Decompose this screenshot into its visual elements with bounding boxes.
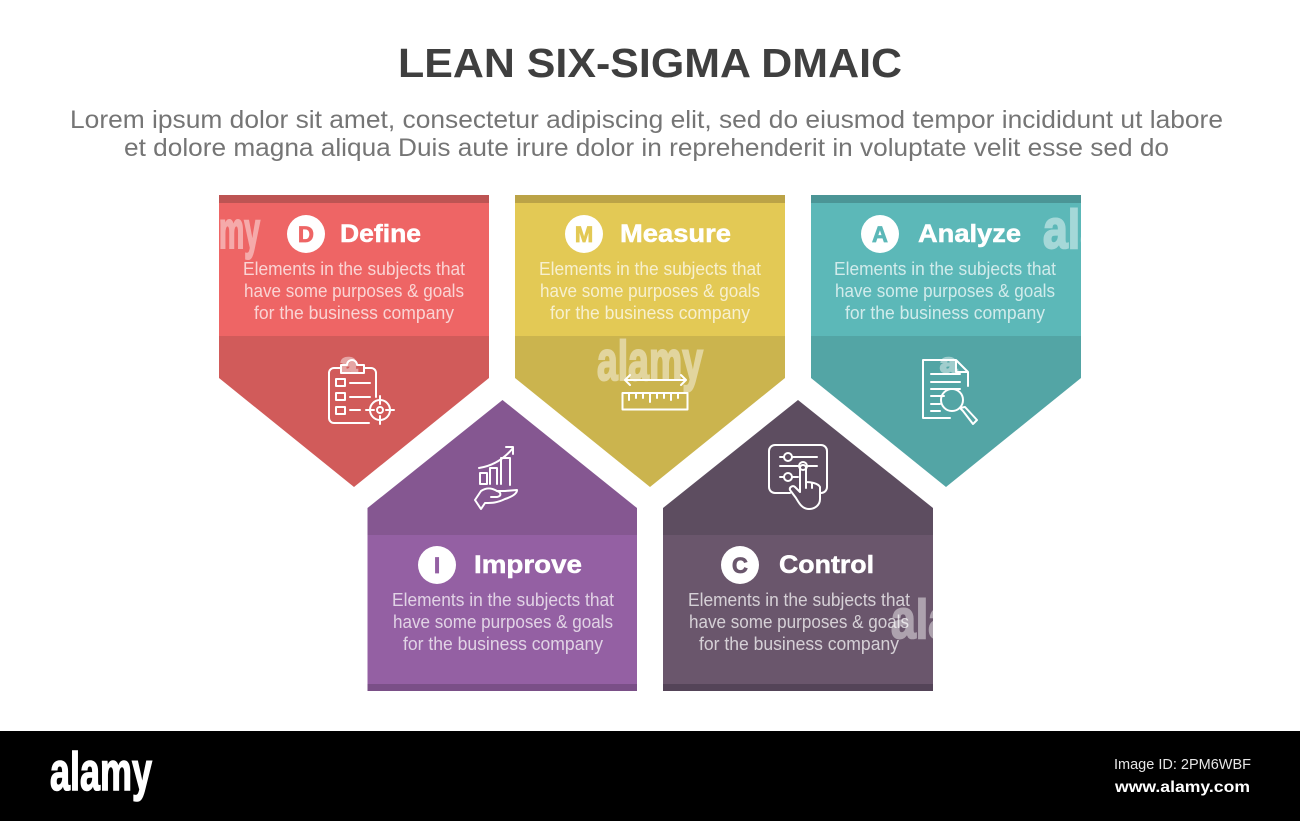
letter badge C: C [732,553,748,578]
subtitle text [70,106,1223,162]
letter badge A [861,215,899,253]
heading Measure: Measure [620,220,731,248]
heading Control: Control [779,551,874,579]
website: www.alamy.com [1114,779,1250,796]
icon: document with magnifier [923,360,977,424]
panel: Improve [368,400,637,691]
body text Define [243,259,465,323]
letter badge I: I [434,553,440,578]
body text Analyze: for the business company [845,303,1045,323]
panel: Measure [515,195,785,487]
letter badge D: D [298,222,314,247]
icon: growth chart on hand [475,447,517,509]
letter badge D [287,215,325,253]
icon: clipboard with target [329,360,394,424]
subtitle text: et dolore magna aliqua Duis aute irure dolor in reprehenderit in voluptate velit esse sed do [124,134,1169,162]
letter badge M: M [575,222,593,247]
heading Define: Define [340,220,421,248]
watermark fragment: ala [891,588,953,650]
watermark small a: a [940,348,958,378]
title: LEAN SIX-SIGMA DMAIC [398,40,902,86]
body text Define: for the business company [254,303,454,323]
footer bar [0,731,1300,821]
footer logo: alamy [50,742,152,802]
watermark fragment: ala [1043,198,1105,260]
panel: Analyze [811,195,1105,487]
body text Control [688,590,910,654]
letter badge A: A [872,222,888,247]
body text Control: have some purposes & goals [689,612,909,632]
letter badge M [565,215,603,253]
body text Improve: Elements in the subjects that [392,590,614,610]
icon: ruler with arrow [622,375,688,410]
watermark small a: a [340,348,358,378]
body text Define: Elements in the subjects that [243,259,465,279]
icon: sliders with touching hand [769,445,827,509]
letter badge C [721,546,759,584]
panel: Control [663,400,953,691]
body text Improve: for the business company [403,634,603,654]
body text Analyze: have some purposes & goals [835,281,1055,301]
heading Analyze: Analyze [918,220,1021,248]
body text Define: have some purposes & goals [244,281,464,301]
subtitle text: Lorem ipsum dolor sit amet, consectetur adipiscing elit, sed do eiusmod tempor incididunt ut labore [70,106,1223,134]
body text Control: Elements in the subjects that [688,590,910,610]
watermark alamy: alamy [597,329,703,392]
watermark fragment: my [219,202,260,260]
panel: Define [219,195,489,487]
body text Improve [392,590,614,654]
heading Improve: Improve [474,551,582,579]
body text Measure: have some purposes & goals [540,281,760,301]
letter badge I [418,546,456,584]
body text Measure: for the business company [550,303,750,323]
body text Measure [539,259,761,323]
image id: Image ID: 2PM6WBF [1114,756,1251,773]
body text Analyze [834,259,1056,323]
body text Measure: Elements in the subjects that [539,259,761,279]
body text Improve: have some purposes & goals [393,612,613,632]
body text Control: for the business company [699,634,899,654]
body text Analyze: Elements in the subjects that [834,259,1056,279]
